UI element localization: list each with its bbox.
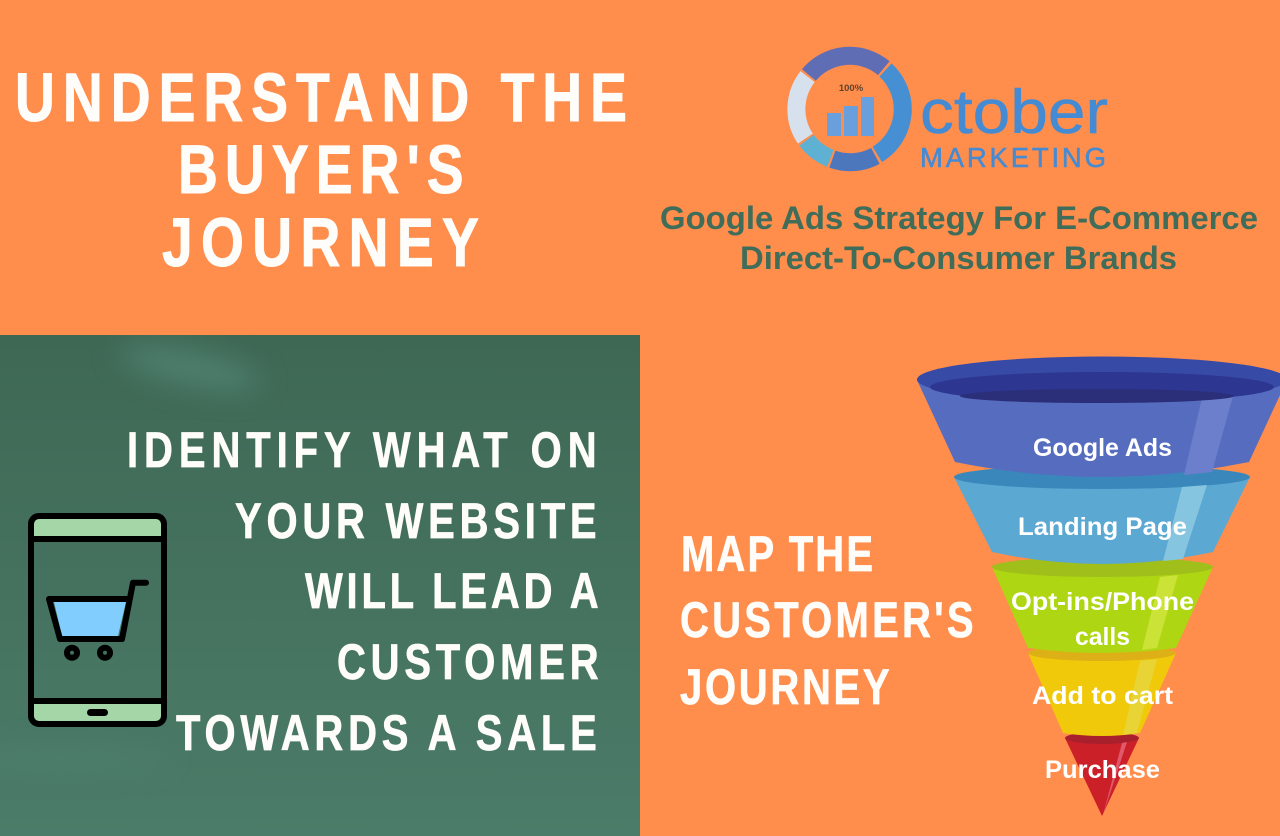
panel heading: TOWARDS A SALE [176,705,597,761]
logo 100% label: 100% [839,83,864,94]
subtitle: Google Ads Strategy For E-Commerce [660,200,1258,236]
funnel tier: Add to cart [1028,645,1176,736]
panel heading: IDENTIFY WHAT ON [127,422,597,478]
map the customer's journey heading: JOURNEY [680,659,890,715]
logo ring chart [796,56,903,162]
title: UNDERSTAND THE [15,59,627,136]
funnel tier: Google Ads: Google Ads [1033,434,1172,462]
subtitle [660,200,1258,276]
icon: phone with shopping cart [31,516,164,724]
funnel tier: Landing Page [954,465,1250,564]
map the customer's journey heading: MAP THE [681,526,873,582]
logo wordmark marketing: MARKETING [920,142,1106,173]
logo wordmark ctober: ctober [920,78,1108,147]
title: JOURNEY [162,204,479,281]
logo bars [827,97,874,136]
logo: October Marketing [796,56,1108,173]
funnel tier: Add to cart: Add to cart [1032,682,1174,710]
funnel tier: Opt-ins/Phone calls [992,557,1213,653]
funnel tier: Landing Page: Landing Page [1018,513,1187,541]
funnel tier: Google Ads [917,356,1280,477]
title [15,59,627,281]
funnel tier: Purchase [1045,732,1160,816]
panel heading: YOUR WEBSITE [235,493,597,549]
funnel tier: Purchase: Purchase [1045,756,1160,784]
funnel tier: Opt-ins/Phone calls: calls [1075,623,1130,651]
funnel chart [917,356,1280,816]
map the customer's journey heading [680,526,974,715]
panel: identify [0,335,640,836]
map the customer's journey heading: CUSTOMER'S [680,592,974,648]
title: BUYER'S [178,131,464,208]
funnel tier: Opt-ins/Phone calls: Opt-ins/Phone [1011,588,1194,616]
panel heading: WILL LEAD A [305,563,599,619]
panel heading [127,422,599,761]
subtitle: Direct-To-Consumer Brands [740,240,1177,276]
panel heading: CUSTOMER [337,634,599,690]
panel background [0,335,640,836]
